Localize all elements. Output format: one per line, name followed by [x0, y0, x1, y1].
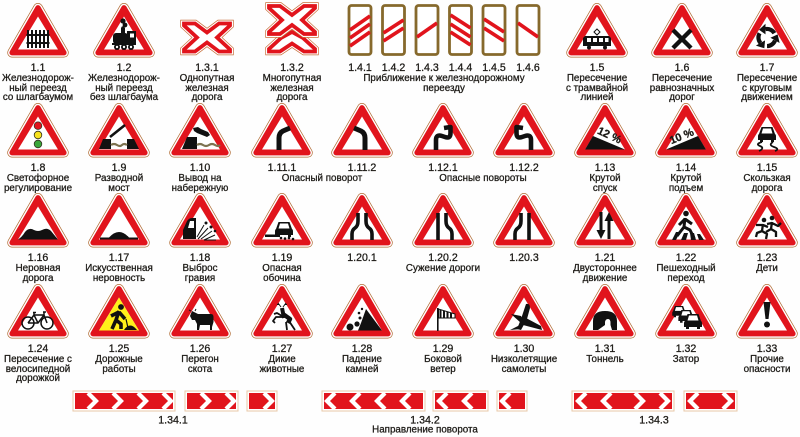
label: Перегон	[181, 354, 219, 365]
icon: cattle	[189, 309, 214, 330]
icon: tunnel	[593, 311, 617, 330]
label: самолеты	[502, 364, 546, 375]
icon: multi-track cross	[269, 6, 315, 52]
icon: deer	[273, 303, 295, 330]
label: 1.34.3	[639, 414, 669, 426]
label: 1.4.4	[449, 62, 472, 74]
label: спуск	[593, 183, 618, 194]
label: дорог	[669, 92, 695, 103]
label: 1.17	[109, 252, 129, 264]
icon: cross	[673, 30, 691, 48]
plate	[684, 391, 737, 411]
label	[88, 62, 160, 103]
icon: slippery road	[758, 127, 777, 151]
plate 1.4.5	[483, 6, 505, 54]
sign 1.20.3	[498, 198, 550, 264]
icon: embankment	[182, 127, 220, 149]
plate	[247, 391, 277, 411]
label: 1.21	[595, 252, 615, 264]
label: ный переезд	[9, 83, 67, 94]
icon: gravel	[183, 218, 216, 240]
plate	[572, 391, 674, 411]
label: движением	[741, 92, 793, 103]
label: переезду	[423, 83, 465, 94]
label: 1.12: Опасные повороты	[439, 173, 527, 184]
label: 1.20.2: Сужение дороги	[406, 263, 480, 274]
label: набережную	[172, 183, 228, 194]
label	[342, 343, 383, 375]
icon: uneven road	[18, 229, 58, 240]
label: работы	[102, 364, 136, 375]
label	[262, 252, 302, 284]
sign 1.28	[336, 289, 388, 375]
icon: falling rocks	[346, 308, 382, 330]
label: 1.29	[433, 343, 453, 355]
label	[650, 62, 714, 103]
label: 1.8	[31, 162, 45, 174]
label	[424, 343, 462, 375]
label: неровность	[93, 273, 145, 284]
label: 1.11	[268, 162, 376, 184]
icon: windsock	[437, 308, 455, 331]
label: Дикие	[268, 354, 296, 365]
label: без шлагбаума	[90, 92, 159, 103]
icon: single cross	[184, 24, 230, 52]
label	[348, 62, 540, 94]
sign 1.16	[12, 198, 64, 284]
label: 1.25	[109, 343, 129, 355]
label: Крутой	[670, 173, 702, 184]
label	[744, 343, 790, 375]
plate	[73, 391, 175, 411]
sign 1.17	[85, 198, 153, 284]
label: ный переезд	[95, 83, 153, 94]
label	[183, 252, 218, 284]
label: 1.7	[760, 62, 774, 74]
chevron plates 1.34.1	[73, 391, 277, 426]
icon: airplane	[510, 304, 542, 330]
label: 1.11: 1.11.1	[268, 162, 296, 174]
label: 1.4.5	[482, 62, 506, 74]
sign 1.9	[93, 108, 145, 194]
icon: traffic light	[34, 122, 42, 148]
icon: children	[756, 216, 781, 239]
label: Железнодорож-	[88, 73, 160, 84]
sign 1.23	[741, 198, 793, 274]
sign 1.32	[660, 289, 712, 365]
label	[737, 62, 798, 103]
label: равнозначных	[650, 83, 714, 94]
sign 1.7	[737, 8, 798, 103]
label: дорога	[192, 92, 223, 103]
label: 1.14	[676, 162, 696, 174]
label: Низколетящие	[491, 354, 558, 365]
sign 1.27	[256, 289, 308, 375]
label	[756, 252, 778, 274]
label: Светофорное	[7, 173, 70, 184]
sign 1.12.2	[498, 108, 550, 153]
label	[573, 252, 637, 284]
label: Опасная	[262, 263, 302, 274]
icon: two-way traffic	[596, 212, 614, 239]
label: Приближение к железнодорожному	[363, 73, 525, 84]
icon: narrowing both	[352, 213, 372, 240]
icon: traffic jam	[672, 306, 702, 329]
icon: right bend	[279, 128, 290, 150]
label: Направление поворота	[372, 424, 478, 436]
icon: locomotive	[112, 18, 136, 50]
label: Затор	[673, 354, 700, 365]
label: 1.2	[117, 62, 131, 74]
sign 1.5	[566, 8, 628, 103]
label: движение	[583, 273, 628, 284]
label: дорога	[277, 92, 308, 103]
label: 1.20.2: 1.20.2	[428, 252, 458, 264]
label: линией	[580, 92, 614, 103]
sign 1.3.2	[263, 6, 321, 103]
label	[263, 62, 321, 103]
label	[16, 252, 60, 284]
label: регулирование	[4, 183, 73, 194]
label: 1.22	[676, 252, 696, 264]
label: Многопутная	[263, 73, 321, 84]
label: Дорожные	[95, 354, 143, 365]
sign 1.33	[741, 289, 793, 375]
label: с трамвайной	[566, 83, 628, 94]
label: 1.10	[190, 162, 210, 174]
label	[656, 252, 716, 284]
sign 1.21	[573, 198, 637, 284]
icon: bicycle	[22, 312, 53, 329]
icon: narrowing right	[438, 213, 452, 240]
label	[566, 62, 628, 103]
label	[85, 252, 153, 284]
icon: drawbridge	[99, 125, 139, 149]
label: переход	[667, 273, 705, 284]
sign 1.3.1	[180, 24, 234, 103]
icon: ascent: 10 %	[668, 126, 696, 147]
label	[2, 62, 74, 103]
label	[180, 62, 234, 103]
label: дорожкой	[16, 373, 60, 384]
icon: soft shoulder	[265, 222, 294, 240]
sign 1.10	[172, 108, 228, 194]
label: Пешеходный	[656, 263, 716, 274]
label: 1.5	[590, 62, 604, 74]
label: 1.23	[757, 252, 777, 264]
sign 1.26	[174, 289, 226, 375]
sign 1.30	[491, 289, 558, 375]
label: 1.4.6	[516, 62, 540, 74]
plate	[322, 391, 425, 411]
sign 1.20.2	[417, 198, 469, 243]
icon: double bend	[436, 127, 450, 150]
plate	[433, 391, 488, 411]
label: 1.33	[757, 343, 777, 355]
sign 1.14	[660, 108, 712, 194]
label: Вывод на	[178, 173, 222, 184]
label: 1.31	[595, 343, 615, 355]
label: Пересечение с	[4, 354, 72, 365]
label: Выброс	[183, 263, 218, 274]
plate 1.4.3	[416, 6, 438, 54]
label	[95, 343, 143, 375]
label: 1.11: Опасный поворот	[282, 173, 363, 184]
label: 1.16	[28, 252, 48, 264]
label: 1.30	[514, 343, 534, 355]
label	[181, 343, 219, 375]
label: 1.12	[428, 162, 539, 184]
label: скота	[188, 364, 213, 375]
icon: double bend left	[516, 127, 531, 150]
label: 1.18	[190, 252, 210, 264]
label	[589, 162, 621, 194]
label: 1.11: 1.11.2	[348, 162, 376, 174]
label: Пересечение	[652, 73, 713, 84]
sign 1.18	[174, 198, 226, 284]
plate 1.4.6	[517, 6, 539, 54]
label: Пересечение	[567, 73, 628, 84]
label	[172, 162, 228, 194]
label: Скользкая	[743, 173, 791, 184]
label: дорога	[752, 183, 783, 194]
label: со шлагбаумом	[3, 92, 73, 103]
sign 1.25	[93, 289, 145, 375]
label: 1.26	[190, 343, 210, 355]
plate	[185, 391, 238, 411]
icon: barrier	[26, 30, 50, 48]
sign 1.6	[650, 8, 714, 103]
label: подъем	[669, 183, 703, 194]
sign 1.8	[4, 108, 73, 194]
label: 1.28	[352, 343, 372, 355]
sign 1.13	[579, 108, 631, 194]
label: 1.32	[676, 343, 696, 355]
plate 1.4.4	[450, 6, 472, 54]
label: 1.34.1	[158, 414, 188, 426]
sign 1.24	[4, 289, 72, 384]
sign 1.2	[88, 8, 160, 103]
label	[260, 343, 305, 375]
icon: narrowing left	[515, 213, 529, 240]
label: 1.20.1	[347, 252, 377, 264]
label: Однопутная	[180, 73, 234, 84]
label: 1.12: 1.12.1	[428, 162, 458, 174]
sign 1.15	[741, 108, 793, 194]
sign 1.12.1	[417, 108, 469, 153]
label: обочина	[263, 273, 301, 284]
label: 1.3.2	[280, 62, 304, 74]
sign 1.1	[2, 8, 74, 103]
sign group 1.4	[348, 6, 540, 94]
icon: roundabout	[751, 24, 783, 51]
label: 1.27	[272, 343, 292, 355]
plate 1.4.1	[349, 6, 371, 54]
icon: descent: 12 %	[595, 125, 623, 147]
label: железная	[270, 83, 314, 94]
label	[743, 162, 791, 194]
icon: speed bump	[100, 232, 138, 240]
label: Прочие	[750, 354, 784, 365]
sign 1.11.2	[336, 108, 388, 153]
label: 1.15	[757, 162, 777, 174]
label	[95, 162, 143, 194]
icon: left bend	[354, 128, 365, 150]
label: велосипедной	[6, 364, 70, 375]
sign 1.22	[656, 198, 716, 284]
label: 1.13	[595, 162, 615, 174]
label: Пересечение	[737, 73, 798, 84]
sign 1.20.1	[336, 198, 388, 264]
label: мост	[108, 183, 130, 194]
label: железная	[185, 83, 229, 94]
label: 1.9	[112, 162, 126, 174]
sign 1.11.1	[256, 108, 308, 153]
label: 1.19	[272, 252, 292, 264]
label: Неровная	[16, 263, 60, 274]
label: опасности	[744, 364, 790, 375]
plate 1.4.2	[382, 6, 404, 54]
label: 1.6	[675, 62, 689, 74]
label: Разводной	[95, 173, 143, 184]
label	[586, 343, 624, 365]
label: Дети	[756, 263, 778, 274]
label: Искусственная	[85, 263, 153, 274]
label: 1.1	[31, 62, 45, 74]
label: 1.4.2	[382, 62, 405, 74]
label: 1.4.3	[415, 62, 439, 74]
label: 1.3.1	[195, 62, 219, 74]
sign 1.19	[256, 198, 308, 284]
label: Боковой	[424, 354, 462, 365]
label: ветер	[430, 364, 456, 375]
label: 1.34.2	[410, 414, 440, 426]
label	[4, 162, 73, 194]
label: с круговым	[742, 83, 792, 94]
sign 1.31	[579, 289, 631, 365]
label: Двустороннее	[573, 263, 637, 274]
label: 1.12: 1.12.2	[509, 162, 539, 174]
label: Падение	[342, 354, 383, 365]
label: дорога	[23, 273, 54, 284]
chevron plates 1.34.2	[322, 391, 527, 436]
label	[491, 343, 558, 375]
label	[669, 162, 703, 194]
label: 1.20.2	[406, 252, 480, 274]
label: 1.24	[28, 343, 48, 355]
icon: road works	[99, 298, 139, 330]
label: Тоннель	[586, 354, 624, 365]
label: животные	[260, 364, 305, 375]
plate	[497, 391, 527, 411]
label	[673, 343, 700, 365]
sign 1.29	[417, 289, 469, 375]
label: гравия	[185, 273, 215, 284]
label	[4, 343, 72, 384]
label	[372, 414, 478, 436]
icon: pedestrian crossing	[672, 211, 704, 240]
icon: tram	[583, 29, 611, 50]
label: камней	[345, 364, 379, 375]
label: 1.4.1	[348, 62, 372, 74]
label: Железнодорож-	[2, 73, 74, 84]
label: Крутой	[589, 173, 621, 184]
icon: exclamation	[764, 302, 770, 328]
label: 1.20.3	[509, 252, 539, 264]
chevron plates 1.34.3	[572, 391, 737, 426]
